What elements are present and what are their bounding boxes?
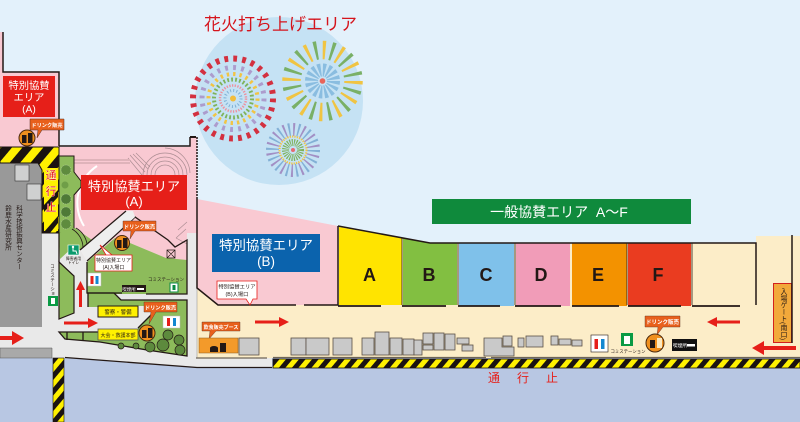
entrance gate xyxy=(774,235,792,343)
block B: B xyxy=(422,265,436,285)
title: 花火打ち上げエリア xyxy=(204,15,357,34)
road edge xyxy=(65,358,272,368)
road closed label: 通 xyxy=(46,168,56,182)
firework: purple and blue burst xyxy=(272,130,314,170)
comm station A xyxy=(148,277,184,292)
panel: general area ground xyxy=(197,200,800,358)
hazard barrier top left: 止 xyxy=(46,200,56,214)
block B xyxy=(403,238,457,305)
block C xyxy=(459,243,514,306)
panel: sponsor area B xyxy=(197,199,338,305)
label: sponsor A: 特別協賛 xyxy=(8,79,50,92)
water xyxy=(0,358,800,422)
smoking icon A: 喫煙所 xyxy=(122,286,136,293)
green lawns xyxy=(59,228,187,356)
road closed bottom: 通行止 xyxy=(488,371,558,385)
entry label B: (B)入場口 xyxy=(226,290,248,298)
hazard stripe bottom xyxy=(273,359,800,368)
white path xyxy=(80,211,135,262)
fireworks circle xyxy=(195,17,363,185)
block D xyxy=(516,243,570,306)
drink callout right xyxy=(645,316,680,352)
trees xyxy=(118,330,185,355)
comm station right: コミステーション xyxy=(610,349,646,355)
tournament HQ label: 大会・救護本部 xyxy=(100,332,136,339)
accessible toilet icon xyxy=(66,245,81,265)
building name xyxy=(4,204,23,270)
panel: sponsor area A main xyxy=(59,137,197,262)
restroom icon A xyxy=(88,273,101,286)
block F: F xyxy=(652,265,664,285)
drink callout lower xyxy=(139,302,177,341)
drink callout A: ドリンク販売 xyxy=(124,222,156,230)
arrow: general area west xyxy=(707,317,740,327)
arrow: general area east xyxy=(255,317,289,327)
sponsor A red heading: 特別協賛エリア xyxy=(88,179,180,194)
smoking icon A xyxy=(122,285,146,293)
entry label B: 特別協賛エリア xyxy=(218,282,256,290)
restroom icon lower xyxy=(163,316,180,328)
block A xyxy=(339,227,402,305)
building name: 鈴鹿水産研究所 xyxy=(4,204,12,252)
drink callout lower: ドリンク販売 xyxy=(145,304,177,312)
general sponsor heading xyxy=(432,199,691,224)
general sponsor blocks xyxy=(338,226,756,306)
building name: 科学技術振興センター xyxy=(14,204,23,270)
sponsor B heading: 特別協賛エリア xyxy=(219,238,313,253)
hazard barrier top left: 行 xyxy=(46,184,56,198)
sponsor B heading: (B) xyxy=(257,254,275,269)
block D: D xyxy=(534,265,548,285)
smoking icon right xyxy=(672,339,697,351)
sponsor A red heading xyxy=(81,175,187,210)
block A: A xyxy=(363,265,376,285)
block E: E xyxy=(592,265,604,285)
arrows left area xyxy=(0,281,98,345)
firework: yellow and green burst xyxy=(292,50,354,112)
entry label B xyxy=(217,281,257,305)
tournament HQ label xyxy=(98,329,138,340)
panel: left sponsor area A top xyxy=(0,32,64,147)
police label: 警察・警備 xyxy=(105,308,132,316)
fireworks area xyxy=(193,17,363,185)
sponsor A red heading: (A) xyxy=(125,194,143,209)
sponsor B heading xyxy=(212,234,320,272)
police label xyxy=(98,306,138,317)
label: sponsor A: (A) xyxy=(22,104,36,116)
smoking icon right: 喫煙所 xyxy=(673,342,687,349)
arrow: entrance east xyxy=(0,331,24,345)
comm station road: コミステーション xyxy=(50,264,56,300)
arrow: east xyxy=(64,318,98,328)
drink callout A xyxy=(114,221,156,250)
panel: grounds base xyxy=(0,233,272,368)
drink callout: ドリンク販売 xyxy=(31,121,63,129)
entry label A: 特別協賛エリア xyxy=(96,257,131,264)
comm station A: コミステーション xyxy=(148,277,184,283)
grey stalls xyxy=(239,332,582,356)
lawn borders xyxy=(59,217,187,356)
road east edge xyxy=(196,233,198,358)
arrow: north xyxy=(76,281,85,307)
green strip xyxy=(59,156,81,233)
accessible toilet icon: トイレ xyxy=(68,260,79,265)
food booth xyxy=(199,322,240,353)
general sponsor heading: 一般協賛エリア A～F xyxy=(490,204,628,220)
block C: C xyxy=(480,265,492,285)
base lines xyxy=(196,356,800,359)
entrance gate: 入場ゲート(南口) xyxy=(779,288,787,340)
label: sponsor A: エリア xyxy=(14,93,44,104)
block F xyxy=(628,243,691,306)
firework: red ring xyxy=(193,58,273,138)
food callout: 飲食販売ブース xyxy=(204,324,238,331)
panel: grey research building xyxy=(0,160,42,327)
comm station right xyxy=(610,333,646,355)
hazard barrier top left xyxy=(0,147,59,233)
hazard stripe vertical xyxy=(53,358,64,422)
label: sponsor A xyxy=(3,76,55,117)
drink callout right: ドリンク販売 xyxy=(646,318,679,326)
restroom icon right xyxy=(591,335,608,352)
accessible toilet icon: 障害者用 xyxy=(66,256,81,261)
comm station road xyxy=(48,264,58,306)
entry label A: (A)入場口 xyxy=(103,264,124,271)
block E xyxy=(572,243,627,306)
arrow: gate west xyxy=(752,341,796,355)
entry label A xyxy=(95,245,132,271)
